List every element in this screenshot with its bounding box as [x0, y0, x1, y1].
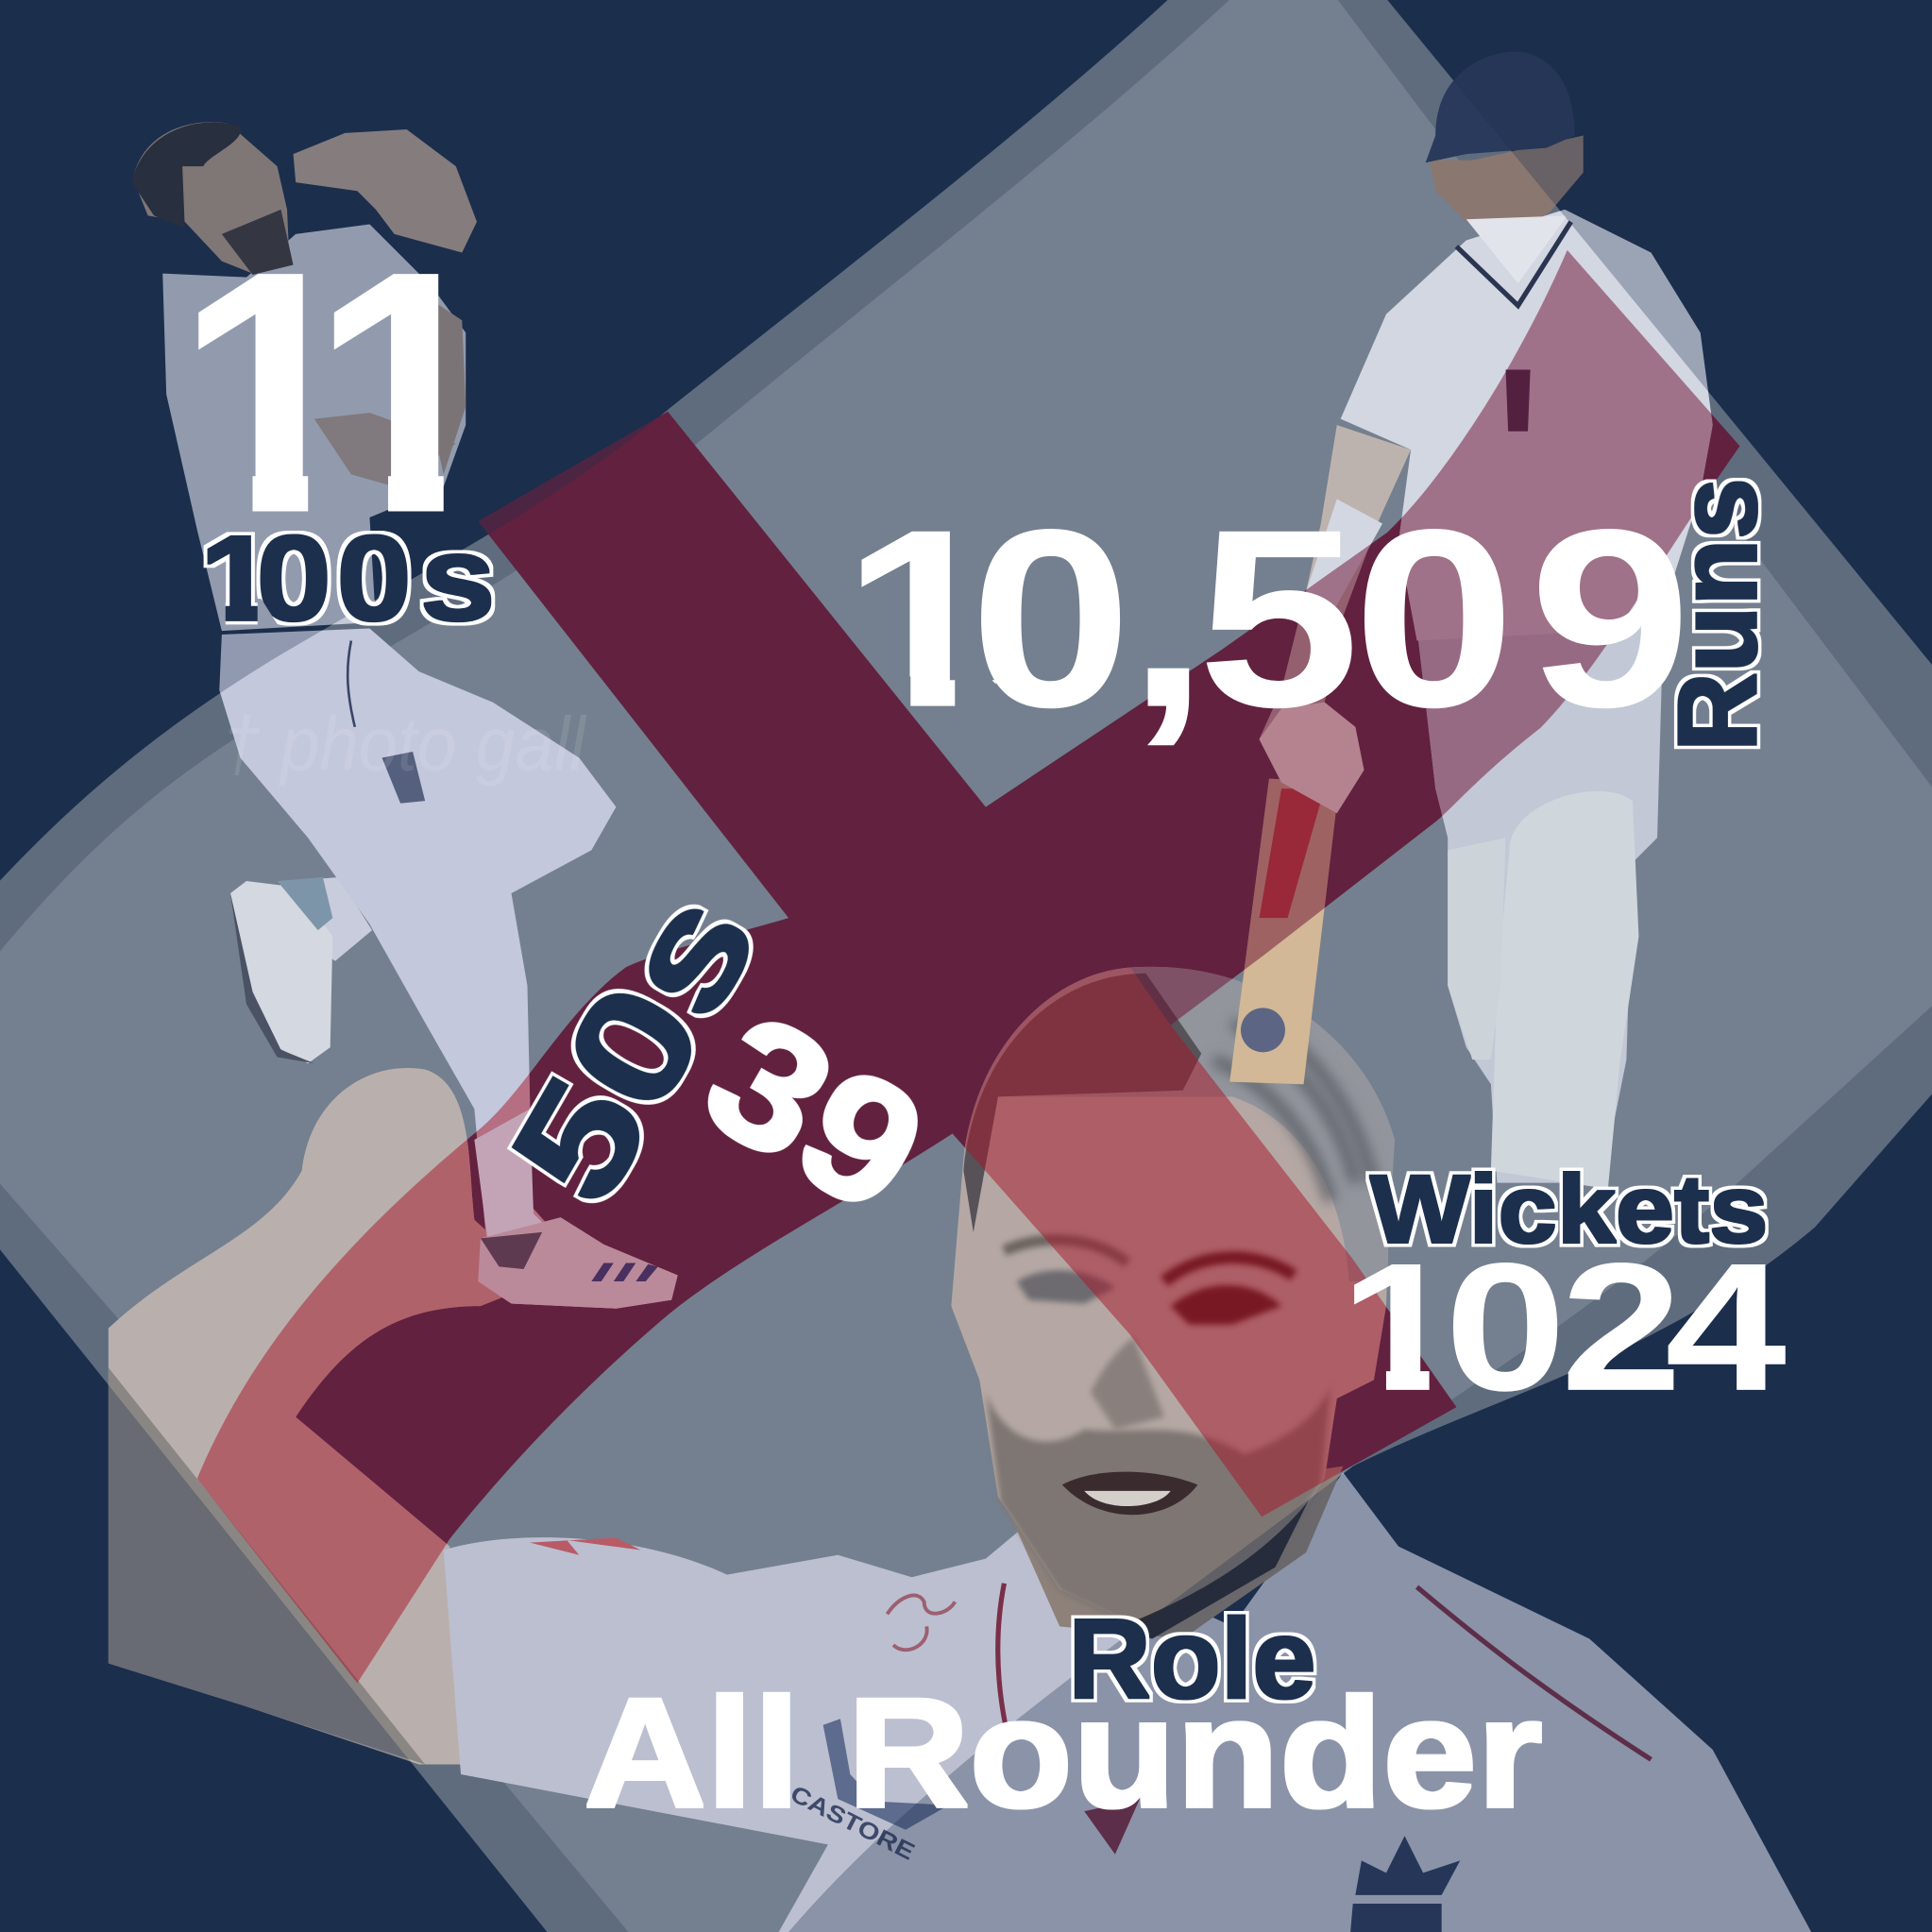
plum tint over batter on upper-right cross arm — [1130, 250, 1713, 1025]
portrait underarm shadow — [109, 1367, 425, 1765]
bowler torso — [162, 224, 466, 631]
portrait shirt — [444, 1472, 1811, 1932]
batter shirt crest — [1506, 369, 1531, 432]
stat: role all rounder — [584, 1596, 1543, 1839]
bowler ankle and shoe over cross — [474, 1109, 678, 1309]
portrait neck — [1010, 1466, 1343, 1638]
bowler trousers — [219, 628, 616, 1245]
bowler raised arm and hand — [294, 129, 477, 252]
batter collar — [1466, 215, 1568, 283]
batter bat — [1229, 779, 1339, 1084]
stat: 39 fifties — [478, 863, 956, 1251]
batter legs and pads — [1417, 622, 1664, 1183]
stat: 10,509 runs — [841, 477, 1779, 760]
portrait crest on shirt — [1350, 1836, 1460, 1932]
label Wickets: Wickets — [1370, 1155, 1768, 1263]
portrait shirt sponsor text: CASTORE — [786, 1781, 919, 1866]
stat: 11 hundreds — [198, 274, 495, 626]
bowler shoe tinted — [478, 1217, 678, 1309]
photo: batter walking off — [1229, 52, 1713, 1189]
bowler ankle — [474, 1109, 552, 1242]
portrait facial features — [1004, 1240, 1294, 1430]
number 10,509: 10,509 — [841, 477, 1691, 760]
photo: bowler in delivery stride — [132, 122, 678, 1309]
label 50s: 50s — [478, 863, 791, 1230]
value All Rounder: All Rounder — [584, 1666, 1543, 1839]
photo: portrait of all-rounder with raised fist — [109, 967, 1811, 1932]
number 1024: 1024 — [1339, 1226, 1787, 1430]
number 11: 11 — [175, 200, 502, 585]
bowler trouser crest — [382, 752, 425, 804]
batter forearm — [1260, 425, 1411, 813]
portrait hair — [963, 967, 1395, 1281]
batter shirt — [1341, 210, 1713, 641]
portrait beard — [986, 1386, 1330, 1636]
red tint over portrait and lower cross arms — [196, 967, 1386, 1683]
label 100s: 100s — [199, 510, 496, 646]
batter helmet and face — [1430, 136, 1584, 242]
bowler front shoe — [478, 1217, 678, 1309]
label Runs: Runs — [1655, 478, 1779, 752]
red cross — [197, 250, 1739, 1683]
portrait mouth — [1062, 1472, 1197, 1515]
batter glove over cross — [1260, 703, 1364, 813]
portrait head — [951, 967, 1392, 1633]
number 39: 39 — [675, 976, 956, 1251]
bowler rear shoe and shin — [290, 877, 372, 961]
label Role: Role — [1068, 1596, 1316, 1722]
photo watermark: † photo gall — [222, 703, 587, 788]
portrait shirt trim — [1417, 1587, 1651, 1759]
bowler head — [133, 122, 290, 274]
stat: 1024 wickets — [1354, 1167, 1786, 1392]
portrait arm and fist — [109, 1068, 542, 1765]
